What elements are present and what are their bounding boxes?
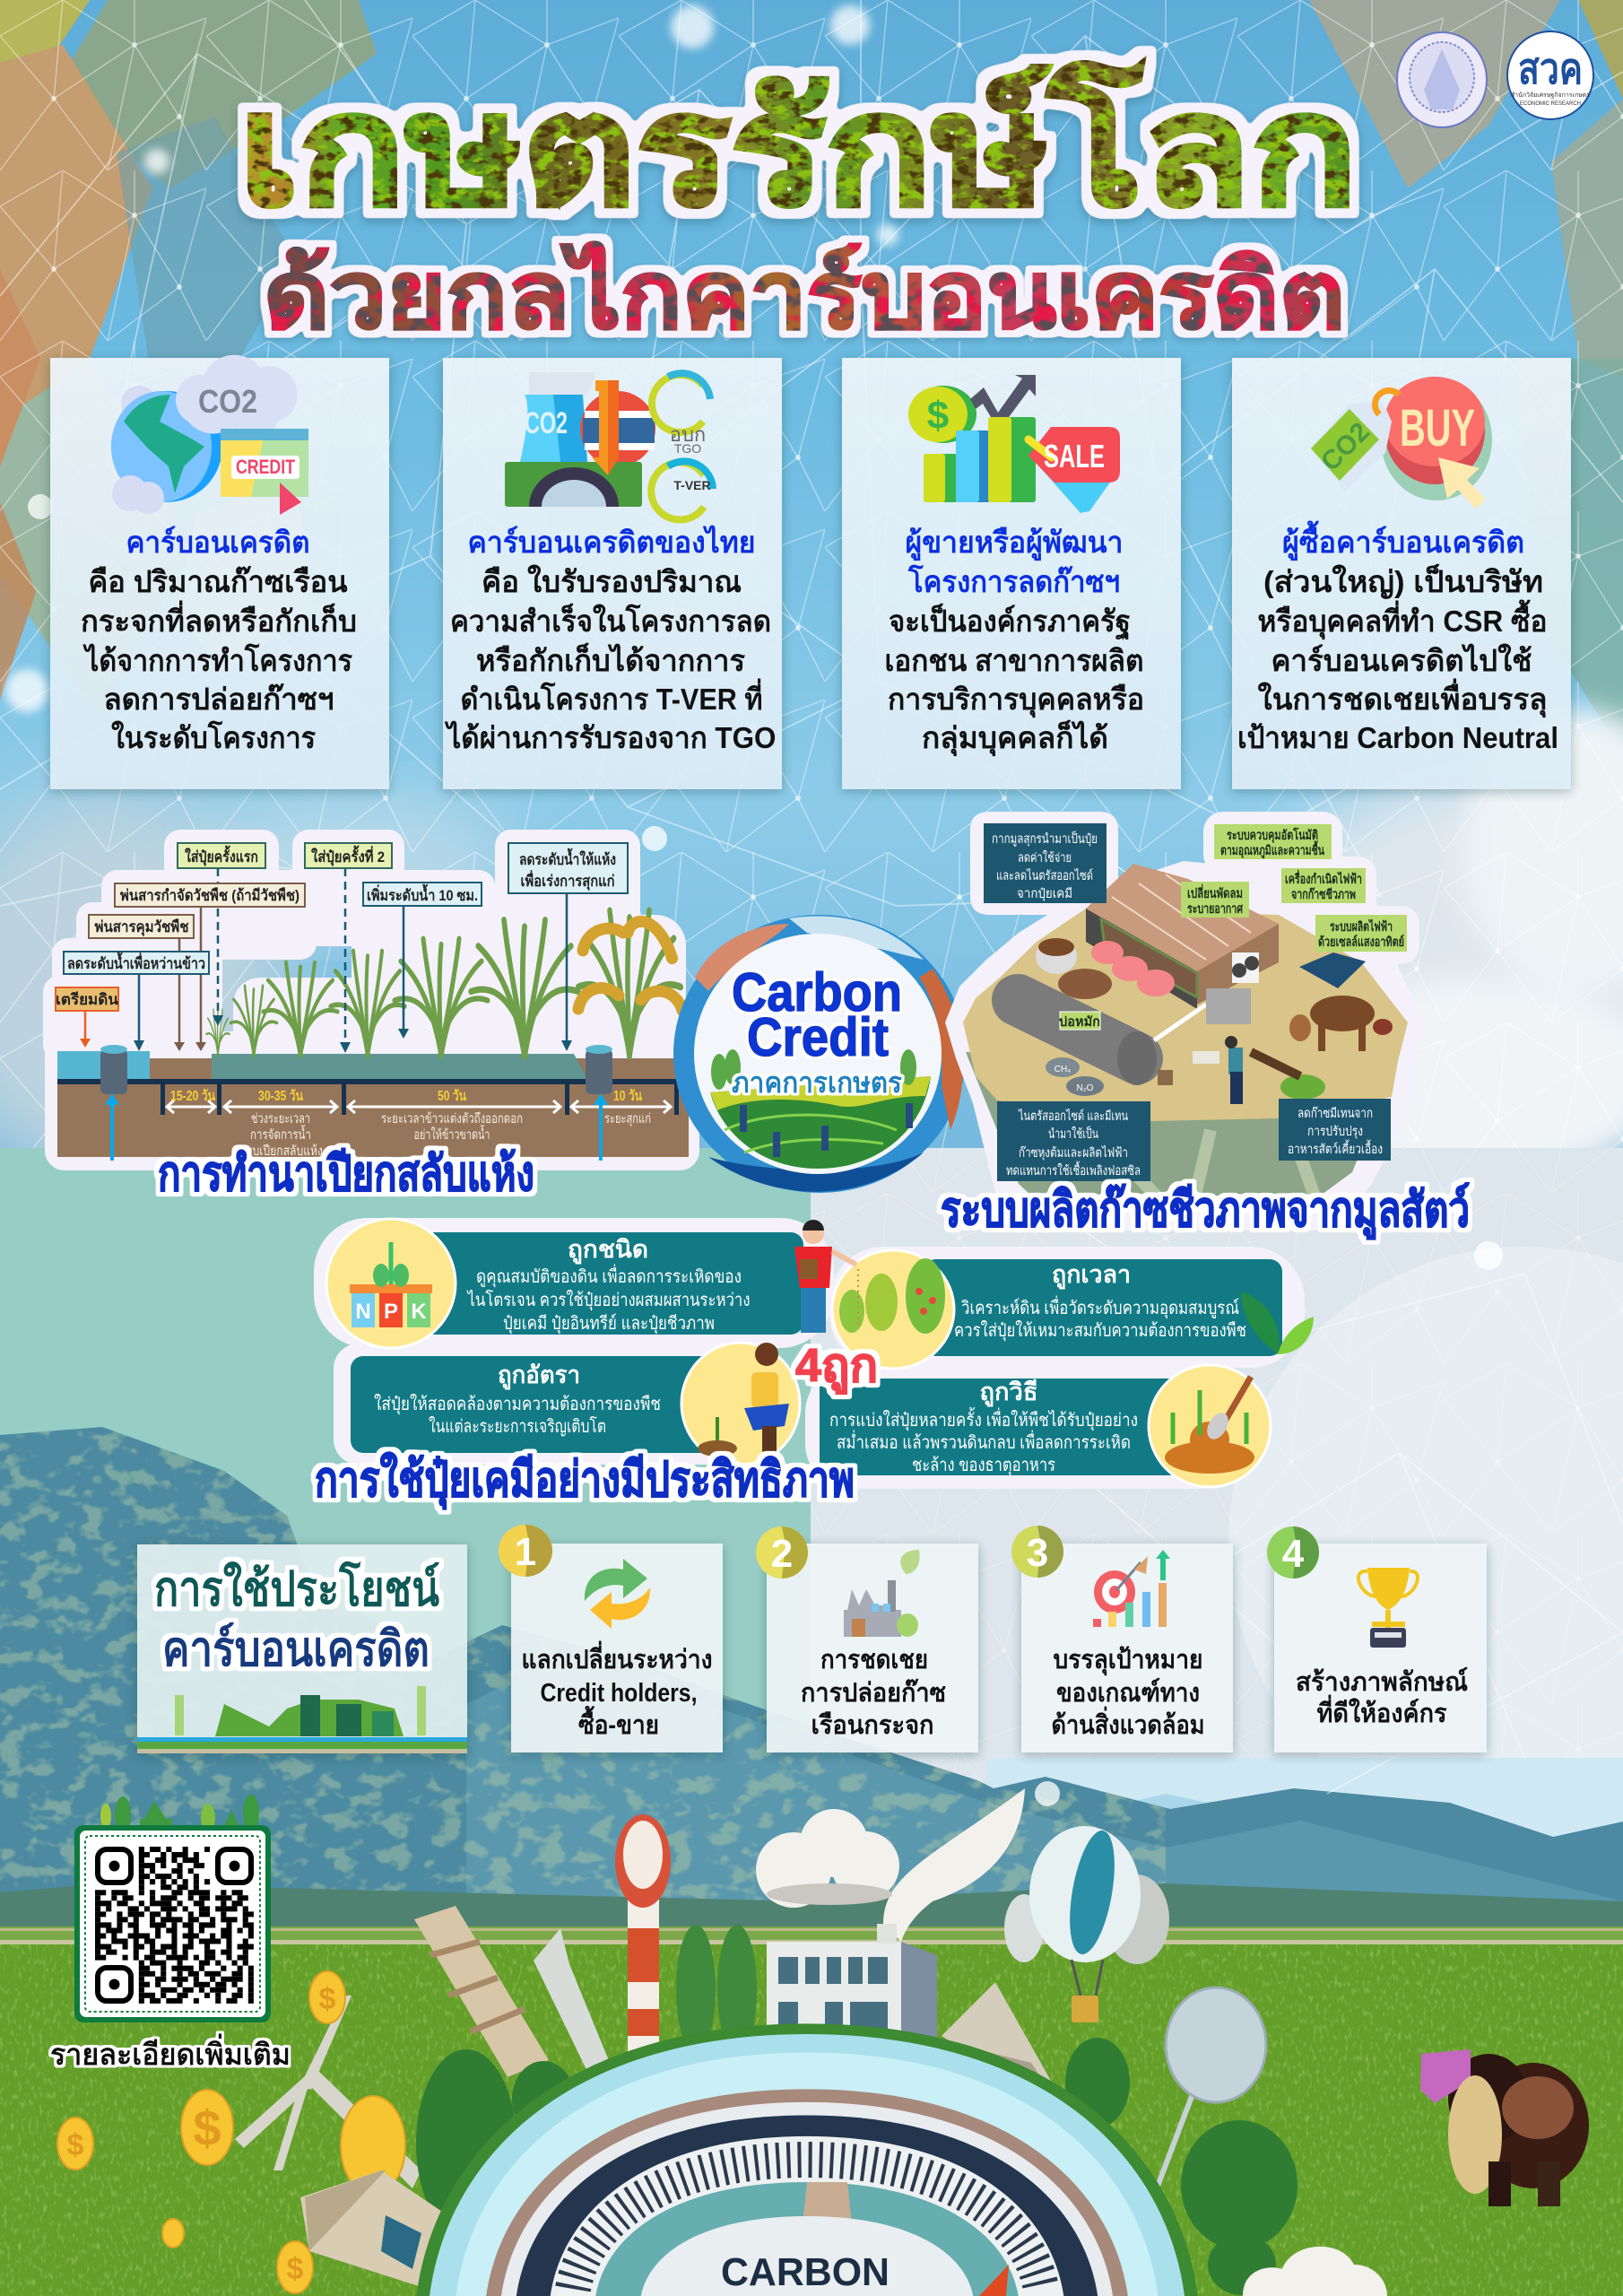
farmer (1158, 1036, 1243, 1104)
biogas callouts: การปรับปรุง (1307, 1125, 1363, 1139)
right type: ปุ๋ยเคมี ปุ๋ยอินทรีย์ และปุ๋ยชีวภาพ (503, 1313, 715, 1335)
panel: biogas from livestock (941, 812, 1470, 1239)
icon: CO2 storage, Thai flag and TGO logos (505, 372, 713, 520)
logo: OAE: สำนักวิจัยเศรษฐกิจการเกษตร (1511, 91, 1590, 99)
icon: factory and leaf (844, 1550, 920, 1637)
badge 4 (1267, 1526, 1319, 1578)
pipes (100, 1045, 612, 1094)
text: buyers (1237, 520, 1558, 754)
panel: buyers (1232, 358, 1571, 789)
panel: sellers (842, 358, 1181, 789)
badge 1: 1 (515, 1530, 536, 1574)
biogas callouts: ลดก๊าซมีเทนจาก (1298, 1106, 1373, 1121)
title: เกษตรรักษ์โลก (239, 61, 1358, 237)
right rate: ในแต่ละระยะการเจริญเติบโต (429, 1416, 606, 1437)
text: sellers: เอกชน สาขาการผลิต (884, 644, 1144, 677)
right rate: ถูกอัตรา (498, 1361, 580, 1390)
text (801, 1646, 946, 1740)
right time: วิเคราะห์ดิน เพื่อวัดระดับความอุดมสมบูรณ์ (961, 1295, 1239, 1319)
right type: N (355, 1300, 371, 1324)
biogas callouts: ระบบผลิตไฟฟ้า (1330, 918, 1393, 935)
wind turbine (235, 1996, 421, 2188)
balloon (1004, 1826, 1169, 2022)
biogas callouts: ลดค่าใช้จ่าย (1018, 849, 1072, 865)
badge 3 (1011, 1526, 1063, 1578)
text: buyers: (ส่วนใหญ่) เป็นบริษัท (1263, 563, 1543, 599)
badge: 4 rights: 4ถูก (795, 1340, 878, 1395)
text: carbon credit: คาร์บอนเครดิต (126, 526, 310, 559)
text: Thai carbon credit: ดำเนินโครงการ T-VER ที่ (461, 678, 762, 716)
text: sellers: จะเป็นองค์กรภาครัฐ (889, 603, 1131, 640)
panel: benefit 3 (1011, 1526, 1233, 1752)
barn (1036, 864, 1279, 1009)
stage labels (56, 843, 628, 1011)
text: สร้างภาพลักษณ์ (1296, 1666, 1468, 1697)
QR caption: รายละเอียดเพิ่มเติม (50, 2033, 291, 2071)
illustration: green city around carbon gauge (57, 1788, 1589, 2296)
icon: CO2 storage, Thai flag and TGO logos: TGO (674, 441, 701, 456)
right time: ควรใส่ปุ๋ยให้เหมาะสมกับความต้องการของพืช (954, 1320, 1246, 1342)
heading: biogas: ระบบผลิตก๊าซชีวภาพจากมูลสัตว์ (941, 1182, 1470, 1239)
text: การปล่อยก๊าซ (801, 1678, 946, 1708)
right method: การแบ่งใส่ปุ๋ยหลายครั้ง เพื่อให้พืชได้รับปุ๋ยอย่าง (829, 1407, 1138, 1431)
right type: ไนโตรเจน ควรใช้ปุ๋ยอย่างผสมผสานระหว่าง (466, 1290, 750, 1311)
right method: ชะล้าง ของธาตุอาหาร (912, 1456, 1055, 1476)
dollar signs on coins: $ (193, 2100, 221, 2156)
text: ซื้อ-ขาย (578, 1705, 659, 1740)
stage labels: เพื่อเร่งการสุกแก่ (520, 870, 615, 891)
logo: OAE: ECONOMIC RESEARCH (1520, 101, 1581, 107)
text: carbon credit: ในระดับโครงการ (111, 720, 316, 754)
text: ที่ดีให้องค์กร (1316, 1694, 1447, 1728)
timeline: 15-20 วัน (170, 1088, 215, 1104)
text: buyers: ผู้ซื้อคาร์บอนเครดิต (1282, 520, 1524, 561)
icon: trophy (1358, 1568, 1418, 1648)
timeline: 50 วัน (438, 1088, 466, 1104)
text: Thai carbon credit (445, 525, 777, 754)
right type: P (384, 1300, 398, 1324)
gauge (416, 2023, 1198, 2296)
dollar signs on coins (67, 1982, 336, 2286)
panel: benefit 2 (756, 1526, 978, 1752)
title: ด้วยกลไกคาร์บอนเครดิต (264, 242, 1345, 348)
icon: buy button with CO2 tag: CO2 (1315, 417, 1376, 477)
text: บรรลุเป้าหมาย (1053, 1646, 1203, 1675)
right type (326, 1219, 803, 1348)
badge 4: 4 (1282, 1532, 1305, 1576)
right method: สม่ำเสมอ แล้วพรวนดินกลบ เพื่อลดการระเหิด (837, 1430, 1131, 1453)
icon: trees above QR (100, 1795, 259, 1834)
panel: benefit 1 (499, 1525, 723, 1752)
text (1051, 1646, 1205, 1740)
QR code block (50, 1795, 291, 2071)
icon: earth, CO2 cloud and credit card (111, 355, 308, 515)
biogas callouts: จากก๊าซชีวภาพ (1291, 887, 1356, 902)
small house (942, 1982, 1051, 2090)
heading: fertilizer: การใช้ปุ๋ยเคมีอย่างมีประสิทธิภาพ (315, 1451, 855, 1510)
timeline: ระยะสุกแก่ (604, 1111, 651, 1127)
stage labels: ลดระดับน้ำให้แห้ง (519, 848, 616, 868)
text: Thai carbon credit: คาร์บอนเครดิตของไทย (468, 525, 755, 559)
bushes (416, 2038, 1298, 2295)
right type: ถูกชนิด (568, 1236, 648, 1265)
stage labels: พ่นสารคุมวัชพืช (95, 918, 189, 936)
panel: alternate wetting and drying diagram (43, 830, 699, 1201)
panel: benefit 4 (1267, 1526, 1487, 1752)
chimney (615, 1814, 671, 2063)
right rate: ใส่ปุ๋ยให้สอดคล้องตามความต้องการของพืช (374, 1394, 661, 1415)
biogas callouts: ตามอุณหภูมิและความชื้น (1220, 840, 1324, 858)
biogas callouts: ก๊าซหุงต้มและผลิตไฟฟ้า (1019, 1144, 1128, 1161)
text: carbon credit: กระจกที่ลดหรือกักเก็บ (81, 600, 357, 638)
text: ด้านสิ่งแวดล้อม (1051, 1706, 1205, 1740)
text: carbon credit: ลดการปล่อยก๊าซฯ (104, 683, 334, 716)
right method: ถูกวิธี (979, 1378, 1038, 1407)
text: sellers: กลุ่มบุคคลก็ได้ (922, 719, 1108, 757)
icon: coin, bars, sale tag: $ (927, 394, 949, 438)
text: carbon credit (81, 526, 357, 754)
right method (820, 1365, 1271, 1487)
text: sellers (884, 526, 1144, 757)
icon: leaves (1241, 1292, 1314, 1354)
stage labels: ใส่ปุ๋ยครั้งแรก (185, 845, 258, 866)
stage labels: พ่นสารกำจัดวัชพืช (ถ้ามีวัชพืช) (120, 886, 299, 904)
smoke and cloud (756, 1788, 1025, 1942)
biogas callouts: เปลี่ยนพัดลม (1187, 883, 1243, 901)
text (1296, 1666, 1468, 1728)
timeline: แบบเปียกสลับแห้ง (239, 1144, 323, 1159)
digester: N₂O (1077, 1083, 1094, 1093)
network lines (0, 0, 1623, 1794)
biogas callouts: ด้วยเซลล์แสงอาทิตย์ (1318, 934, 1404, 950)
rice growth stages (206, 910, 683, 1057)
biogas callouts: และลดไนตรัสออกไซด์ (996, 867, 1093, 883)
text: buyers: คาร์บอนเครดิตไปใช้ (1271, 643, 1532, 677)
text: ของเกณฑ์ทาง (1056, 1677, 1200, 1708)
biogas callouts: ระบายอากาศ (1187, 902, 1244, 917)
right type: K (411, 1300, 427, 1324)
icon: CO2 storage, Thai flag and TGO logos: CO2 (525, 406, 568, 440)
badge 2 (756, 1526, 808, 1578)
biogas callouts: อาหารสัตว์เคี้ยวเอื้อง (1288, 1139, 1383, 1157)
panel: carbon credit definition (50, 355, 389, 789)
text: Thai carbon credit: คือ ใบรับรองปริมาณ (482, 564, 742, 598)
biogas callouts: เครื่องกำเนิดไฟฟ้า (1285, 869, 1362, 887)
biogas callouts: กากมูลสุกรนำมาเป็นปุ๋ย (992, 830, 1098, 847)
biogas callouts: ไนตรัสออกไซด์ และมีเทน (1018, 1108, 1128, 1124)
dollar signs on coins: $ (319, 1982, 336, 2016)
gauge: CARBON (721, 2250, 890, 2294)
timeline: 10 วัน (613, 1088, 642, 1104)
digester: CH₄ (1055, 1065, 1071, 1074)
logo: OAE: สวค (1518, 46, 1583, 93)
person (794, 1220, 858, 1333)
coins (57, 1971, 405, 2293)
stage labels: ใส่ปุ๋ยครั้งที่ 2 (311, 845, 385, 866)
timeline: การจัดการน้ำ (250, 1125, 311, 1143)
timeline: 30-35 วัน (258, 1088, 303, 1104)
text: Credit holders, (540, 1679, 698, 1708)
timeline: อย่าให้ข้าวขาดน้ำ (414, 1125, 490, 1143)
panel: carbon credit agriculture globe: Credit (747, 1007, 889, 1067)
text: sellers: โครงการลดก๊าซฯ (907, 564, 1120, 598)
panel: benefits banner: การใช้ประโยชน์ (154, 1561, 439, 1616)
text: Thai carbon credit: ได้ผ่านการรับรองจาก TGO (445, 720, 777, 754)
title (239, 61, 1358, 348)
logo: Office of the Permanent Secretary seal (1397, 32, 1487, 127)
timeline (161, 1083, 679, 1159)
logo: OAE (1507, 31, 1593, 119)
text: การชดเชย (820, 1646, 928, 1674)
icon: buy button with CO2 tag: BUY (1400, 399, 1475, 457)
farmer in field (1420, 2049, 1589, 2206)
right time: ถูกเวลา (1052, 1261, 1131, 1290)
biogas callouts: จากปุ๋ยเคมี (1017, 886, 1072, 901)
icon: CO2 storage, Thai flag and TGO logos: T-VER (673, 478, 711, 492)
badge 3: 3 (1027, 1531, 1048, 1575)
cow (1289, 996, 1393, 1051)
glass globe on stick (1157, 1987, 1266, 2188)
biogas callouts: นำมาใช้เป็น (1048, 1125, 1098, 1142)
badge 1 (499, 1525, 552, 1577)
feed (1280, 1074, 1325, 1100)
dollar signs on coins: $ (67, 2128, 84, 2162)
trees behind building (676, 1925, 757, 2054)
building (767, 1924, 937, 2045)
icon: coin, bars, sale tag (908, 375, 1120, 513)
biogas callouts: ระบบควบคุมอัตโนมัติ (1227, 827, 1318, 843)
text: buyers: หรือบุคคลที่ทำ CSR ซื้อ (1257, 599, 1548, 640)
biogas callouts (984, 823, 1407, 1181)
text: sellers: การบริการบุคคลหรือ (888, 683, 1144, 718)
panel: Thai carbon credit (443, 358, 782, 789)
icon: earth, CO2 cloud and credit card: CO2 (198, 383, 257, 420)
biogas callouts: บ่อหมัก (1059, 1015, 1100, 1030)
panel: benefits banner (137, 1544, 467, 1753)
panel: carbon credit agriculture globe: ภาคการเกษตร (732, 1066, 902, 1099)
right rate (351, 1343, 800, 1465)
blue water arrows (105, 1093, 608, 1161)
green factory illustration (137, 1686, 467, 1753)
QR modules (95, 1849, 254, 2001)
text: Thai carbon credit: หรือกักเก็บได้จากการ (476, 642, 745, 677)
digester (1018, 1000, 1206, 1096)
paper tower (414, 1906, 549, 2077)
biogas callouts: ทดแทนการใช้เชื้อเพลิงฟอสซิล (1006, 1161, 1141, 1178)
house lower left (300, 2170, 461, 2287)
stage arrows (80, 868, 572, 1053)
text: carbon credit: ได้จากการทำโครงการ (82, 643, 352, 677)
timeline: ระยะเวลาข้าวแต่งตัวถึงออกดอก (381, 1111, 523, 1126)
text: เรือนกระจก (811, 1711, 934, 1740)
icon: coin, bars, sale tag: SALE (1044, 438, 1105, 474)
stage labels: เพิ่มระดับน้ำ 10 ซม. (367, 883, 478, 904)
QR finder patterns (98, 1849, 251, 2001)
dollar signs on coins: $ (287, 2252, 304, 2286)
icon: buy button with CO2 tag (1310, 377, 1492, 509)
stage labels: เตรียมดิน (56, 990, 118, 1008)
text: Thai carbon credit: ความสำเร็จในโครงการลด (450, 603, 771, 638)
text: sellers: ผู้ขายหรือผู้พัฒนา (906, 526, 1123, 561)
generator and solar panel (1206, 952, 1366, 1024)
heading: AWD: การทำนาเปียกสลับแห้ง (158, 1147, 534, 1201)
panel: 4 rights of fertilizer use (314, 1218, 1314, 1510)
timeline: ช่วงระยะเวลา (251, 1111, 310, 1126)
panel: carbon credit agriculture globe: Carbon (732, 962, 902, 1022)
text: buyers: ในการชดเชยเพื่อบรรลุ (1257, 678, 1548, 718)
icon: CO2 storage, Thai flag and TGO logos: อบก (670, 423, 706, 446)
stage labels: ลดระดับน้ำเพื่อหว่านข้าว (67, 952, 205, 972)
panel: carbon credit agriculture globe (673, 915, 966, 1193)
badge 2: 2 (771, 1532, 793, 1576)
icon: exchange arrows (585, 1559, 650, 1629)
cloud lower right (1243, 2247, 1387, 2296)
right time (832, 1250, 1282, 1369)
right type: ดูคุณสมบัติของดิน เพื่อลดการระเหิดของ (476, 1264, 742, 1288)
text: carbon credit: คือ ปริมาณก๊าซเรือน (88, 565, 348, 598)
panel: benefits banner: คาร์บอนเครดิต (162, 1622, 430, 1676)
icon: earth, CO2 cloud and credit card: CREDIT (236, 456, 295, 478)
icon: target and growth bars (1093, 1550, 1170, 1627)
text: แลกเปลี่ยนระหว่าง (522, 1640, 712, 1674)
candle tower (534, 1928, 610, 2081)
text: buyers: เป้าหมาย Carbon Neutral (1237, 721, 1558, 754)
text (522, 1640, 712, 1740)
